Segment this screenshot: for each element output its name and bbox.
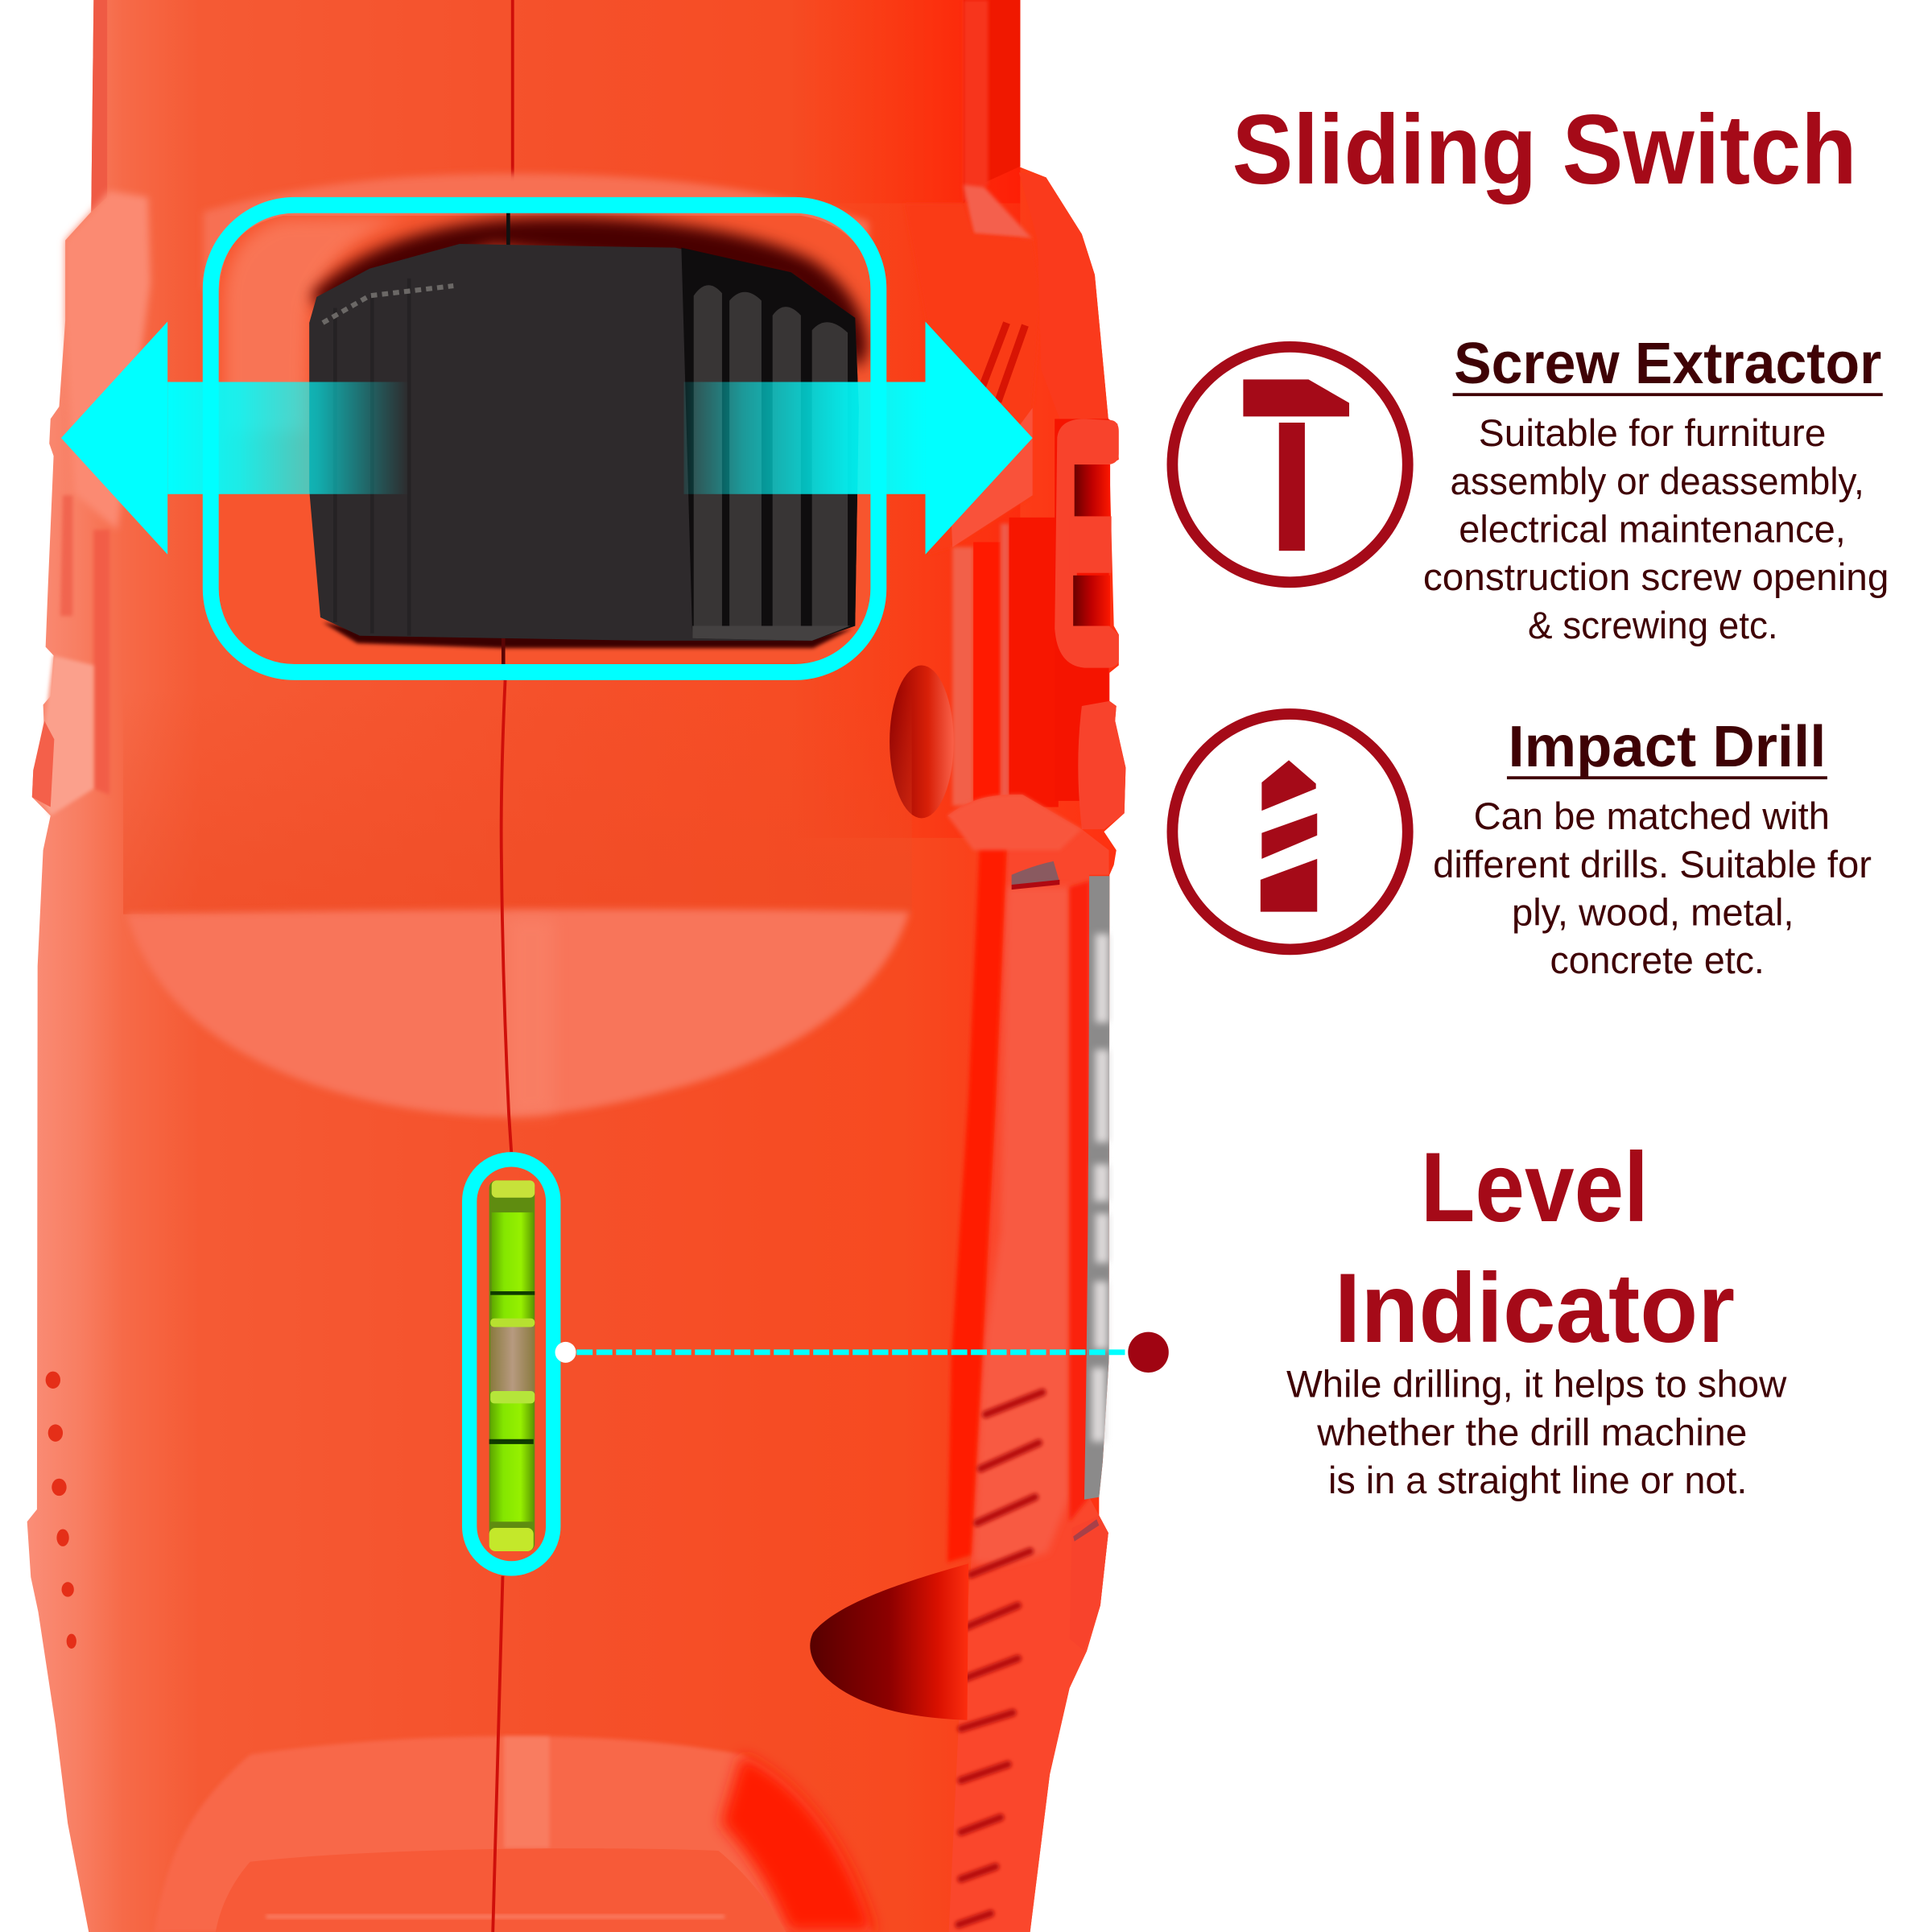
left neck strip [91, 0, 107, 212]
description: impact drill: Can be matched with [1474, 795, 1830, 838]
wedge under arrow [952, 408, 1033, 547]
upper mark [490, 1291, 535, 1295]
centre seam [493, 0, 513, 1932]
lug frame [1055, 419, 1119, 668]
description: impact drill [1433, 795, 1872, 982]
lower dome red shade [720, 1755, 875, 1932]
leader line [555, 1332, 1169, 1373]
vertical side channels [952, 518, 1059, 807]
lower fluid [490, 1393, 534, 1521]
switch knob [309, 244, 859, 641]
pan shade [123, 690, 912, 914]
heading: screw extractor: Screw Extractor [1454, 332, 1881, 396]
right vents [959, 1393, 1042, 1925]
knob recess shadow [311, 217, 868, 369]
outer right shell [1019, 172, 1108, 419]
panel: level indicator [1286, 1132, 1787, 1502]
drill housing silhouette [27, 0, 1125, 1932]
left arrow head [61, 321, 167, 555]
description: screw extractor: & screwing etc. [1528, 605, 1778, 647]
description: screw extractor: Suitable for furniture [1479, 412, 1826, 455]
right ribbed section [681, 248, 859, 641]
white label letters [1092, 934, 1109, 1442]
panel top arch [947, 795, 1082, 850]
heading: level: Level [1421, 1132, 1649, 1242]
description: level indicator: whether the drill machine [1316, 1411, 1747, 1454]
left side groove [60, 495, 72, 616]
grip hole [810, 1563, 968, 1720]
left rib dots [46, 1372, 76, 1649]
crescent centre highlight [508, 918, 555, 1117]
highlight capsule: level [469, 1159, 553, 1568]
lower seam in recess [502, 638, 506, 680]
right red side [1070, 881, 1089, 1521]
right ridges [977, 323, 1025, 402]
level indicator vial [489, 1180, 535, 1551]
right shell lower [1055, 419, 1109, 801]
heading: indicator: Indicator [1335, 1253, 1735, 1363]
right shoulder block [904, 204, 1041, 555]
left groove [93, 530, 109, 795]
double arrow: slide direction [61, 321, 1033, 555]
panel pale band [973, 887, 1070, 1565]
description: impact drill: different drills. Suitable for [1433, 844, 1872, 886]
drill body photo [27, 0, 1125, 1932]
neck bright right [964, 0, 1020, 204]
grey side label [1084, 876, 1109, 1500]
lower dome inner [216, 1848, 786, 1932]
panel: sliding switch knob [204, 174, 871, 680]
lower dome [154, 1736, 871, 1932]
lower side lip [1070, 1516, 1108, 1651]
panel: impact drill [1172, 714, 1872, 982]
panel: screw extractor [1172, 332, 1889, 647]
panel slot shade [1012, 880, 1059, 890]
inner ledge line [266, 1915, 724, 1918]
heading underline [1453, 393, 1883, 396]
interior top-left light [225, 217, 407, 431]
crescent highlight [127, 909, 910, 1117]
dashed connector [576, 1351, 1128, 1354]
icon: drill bit [1172, 714, 1408, 949]
right ribs [694, 285, 848, 629]
bubble ring bottom [490, 1391, 535, 1403]
bubble [490, 1326, 535, 1393]
side dimple [890, 666, 954, 818]
red strip [947, 845, 1007, 1563]
heading underline [1507, 776, 1827, 779]
bottom cap [489, 1528, 534, 1551]
left shoulder [65, 191, 151, 530]
icon: hammer [1172, 347, 1408, 582]
title: sliding switch: Sliding Switch [1232, 94, 1857, 204]
maroon anchor dot [1128, 1332, 1169, 1373]
right arrow shaft [683, 382, 925, 494]
white anchor dot [555, 1342, 576, 1363]
description: level indicator: is in a straight line or not. [1328, 1459, 1747, 1502]
right arrow head [925, 321, 1033, 555]
description: screw extractor: electrical maintenance, [1459, 508, 1846, 551]
description: screw extractor: assembly or deassembly, [1451, 460, 1864, 503]
description: screw extractor: construction screw opening [1423, 556, 1889, 599]
panel slot [1012, 861, 1059, 886]
lower side knob [1078, 701, 1125, 829]
description: level indicator [1286, 1364, 1787, 1502]
top cap [492, 1180, 535, 1198]
lip slot [1073, 1519, 1099, 1542]
bubble ring top [490, 1319, 535, 1327]
vial backing [489, 1180, 535, 1551]
right grip panel [947, 795, 1109, 1932]
seam in recess [506, 212, 510, 246]
description: impact drill: concrete etc. [1550, 939, 1765, 982]
heading: impact drill: Impact Drill [1508, 715, 1826, 779]
description: impact drill: ply, wood, metal, [1512, 891, 1794, 934]
upper fluid [492, 1212, 534, 1326]
recess lower shadow [323, 622, 852, 648]
lit dome above switch [204, 174, 869, 290]
frame interior [219, 216, 871, 663]
description: screw extractor [1423, 412, 1889, 647]
lug slots [1075, 464, 1110, 516]
neck right edge [964, 0, 989, 204]
left pale cut [37, 655, 93, 815]
top rib highlights [323, 286, 453, 323]
left arrow shaft [167, 382, 409, 494]
description: level indicator: While drilling, it helps to show [1286, 1364, 1787, 1406]
lower dome centre highlight [504, 1736, 550, 1848]
left ribs [335, 279, 409, 636]
lower mark [489, 1439, 534, 1444]
knob lower light rim [692, 626, 850, 641]
highlight frame: switch [211, 205, 878, 672]
side lit wedge [964, 185, 1033, 239]
lug middle bar [1070, 516, 1112, 573]
shoulder red shade [789, 204, 1020, 838]
neck red shade [789, 0, 1020, 204]
left lug [32, 720, 54, 807]
